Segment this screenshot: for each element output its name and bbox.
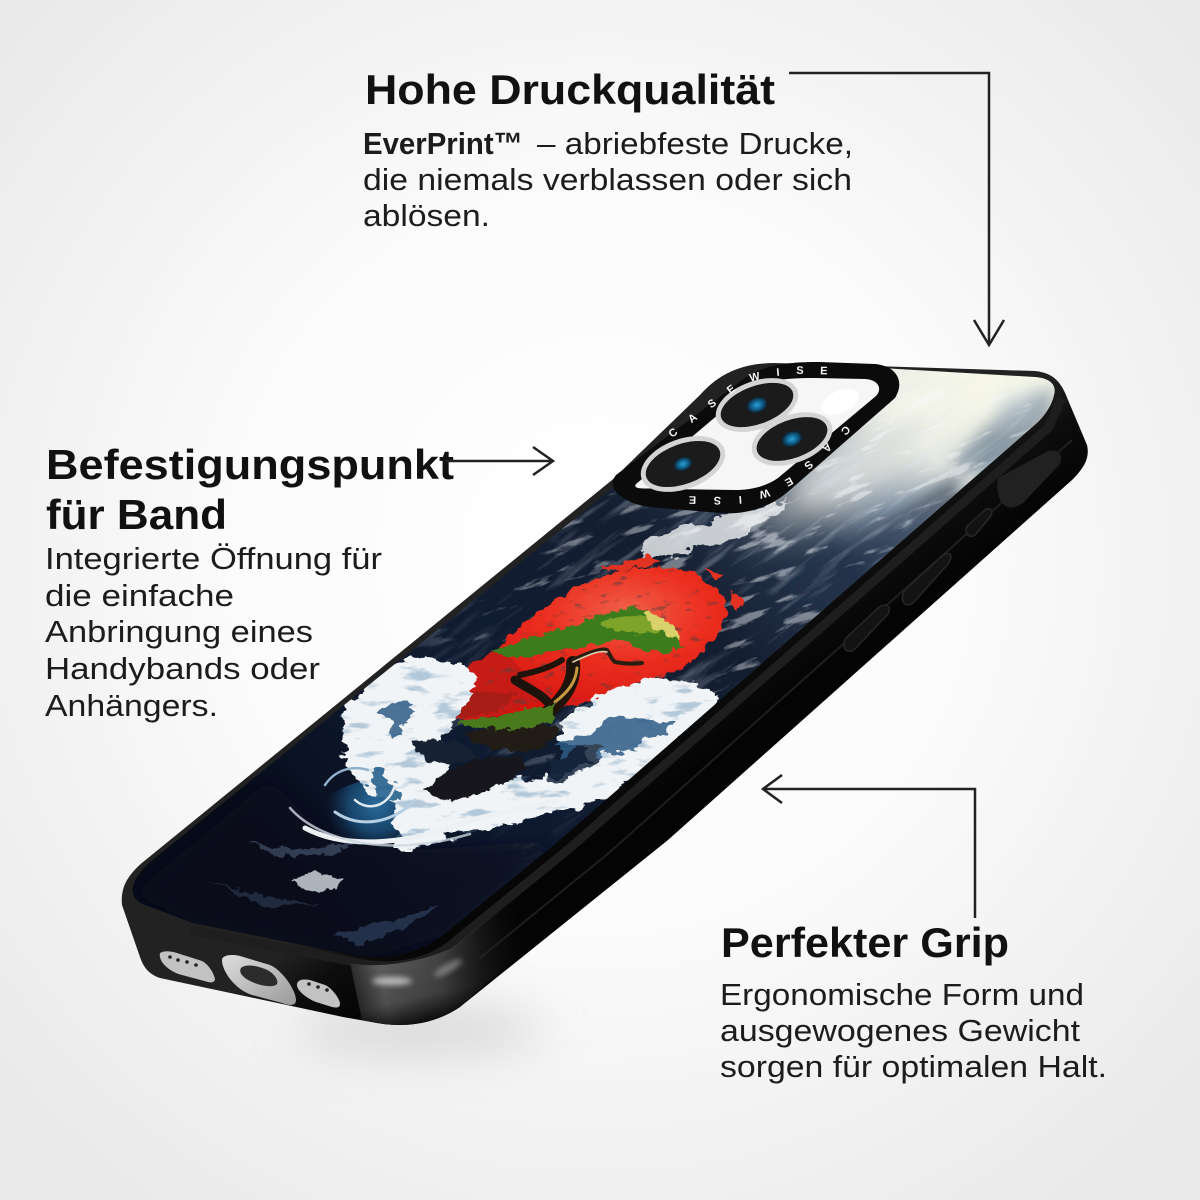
heading: Perfekter Grip: Perfekter Grip (721, 919, 1009, 966)
camera plate (635, 378, 879, 490)
body text: sorgen für optimalen Halt. (720, 1049, 1107, 1084)
sky glow (740, 368, 1000, 530)
ring brand text bottom: CASEWISE (689, 426, 850, 505)
foam brush texture (340, 657, 719, 850)
phone case (122, 363, 1088, 1025)
body text: ausgewogenes Gewicht (720, 1013, 1080, 1048)
callout: print quality (363, 66, 1004, 345)
lower foam streaks (210, 840, 440, 945)
callout: strap attachment (45, 441, 553, 723)
arrow to side of case (763, 775, 975, 918)
camera module (612, 362, 900, 514)
sun splatter (600, 556, 744, 612)
lens right (744, 402, 840, 476)
heading: Befestigungspunkt für Band: für Band (46, 491, 227, 538)
body text (363, 126, 853, 233)
blue water in the foam (372, 704, 675, 800)
swirl water (329, 782, 402, 845)
artwork base (132, 368, 1055, 957)
body text: Ergonomische Form und (720, 977, 1084, 1012)
heading: Befestigungspunkt für Band: Befestigungspunkt (46, 441, 454, 488)
body text: die niemals verblassen oder sich (363, 162, 852, 197)
white streak beneath camera (640, 500, 790, 562)
side rim highlight (190, 398, 1062, 966)
charging port (222, 955, 296, 1005)
body text: Integrierte Öffnung für (45, 541, 382, 576)
case body (122, 363, 1088, 1025)
bottom right corner sheen (350, 888, 530, 1025)
body text: Handybands oder (45, 651, 320, 686)
body text: ablösen. (363, 198, 490, 233)
rocks (413, 725, 560, 799)
lens left (633, 425, 733, 503)
ring brand text top: CASEWISE (669, 366, 828, 436)
body text (45, 541, 382, 723)
body text: Anbringung eines (45, 614, 313, 649)
left speaker grille (160, 951, 215, 982)
callout: grip (720, 775, 1107, 1084)
body text: – abriebfeste Drucke, (537, 126, 853, 161)
phone ground shadow (295, 1006, 545, 1054)
heading: Befestigungspunkt für Band (46, 441, 454, 538)
temple (458, 692, 517, 718)
bonsai tree trunk (515, 649, 642, 715)
charging port and speakers (160, 951, 340, 1008)
body text: EverPrint™ (363, 126, 523, 161)
body text: die einfache (45, 578, 234, 613)
dark ocean lower area (459, 844, 543, 884)
foam and waves (340, 657, 719, 850)
camera ring (613, 362, 899, 513)
arrow to top edge (789, 73, 1004, 345)
lens top (708, 368, 806, 442)
body text: Anhängers. (45, 688, 218, 723)
dark flecks over sun (460, 568, 727, 720)
printed artwork (132, 368, 1055, 957)
paint streak texture (416, 390, 1032, 855)
arrow to camera ring (445, 447, 553, 475)
right speaker grille (297, 979, 340, 1008)
side button (997, 450, 1061, 507)
blue grey clouds (790, 385, 1055, 600)
whirlpool (290, 768, 560, 845)
heading: Hohe Druckqualität: Hohe Druckqualität (365, 66, 775, 113)
body text (720, 977, 1107, 1084)
volume and action buttons (844, 509, 992, 651)
bonsai foliage (457, 609, 683, 730)
red sun (456, 567, 727, 722)
